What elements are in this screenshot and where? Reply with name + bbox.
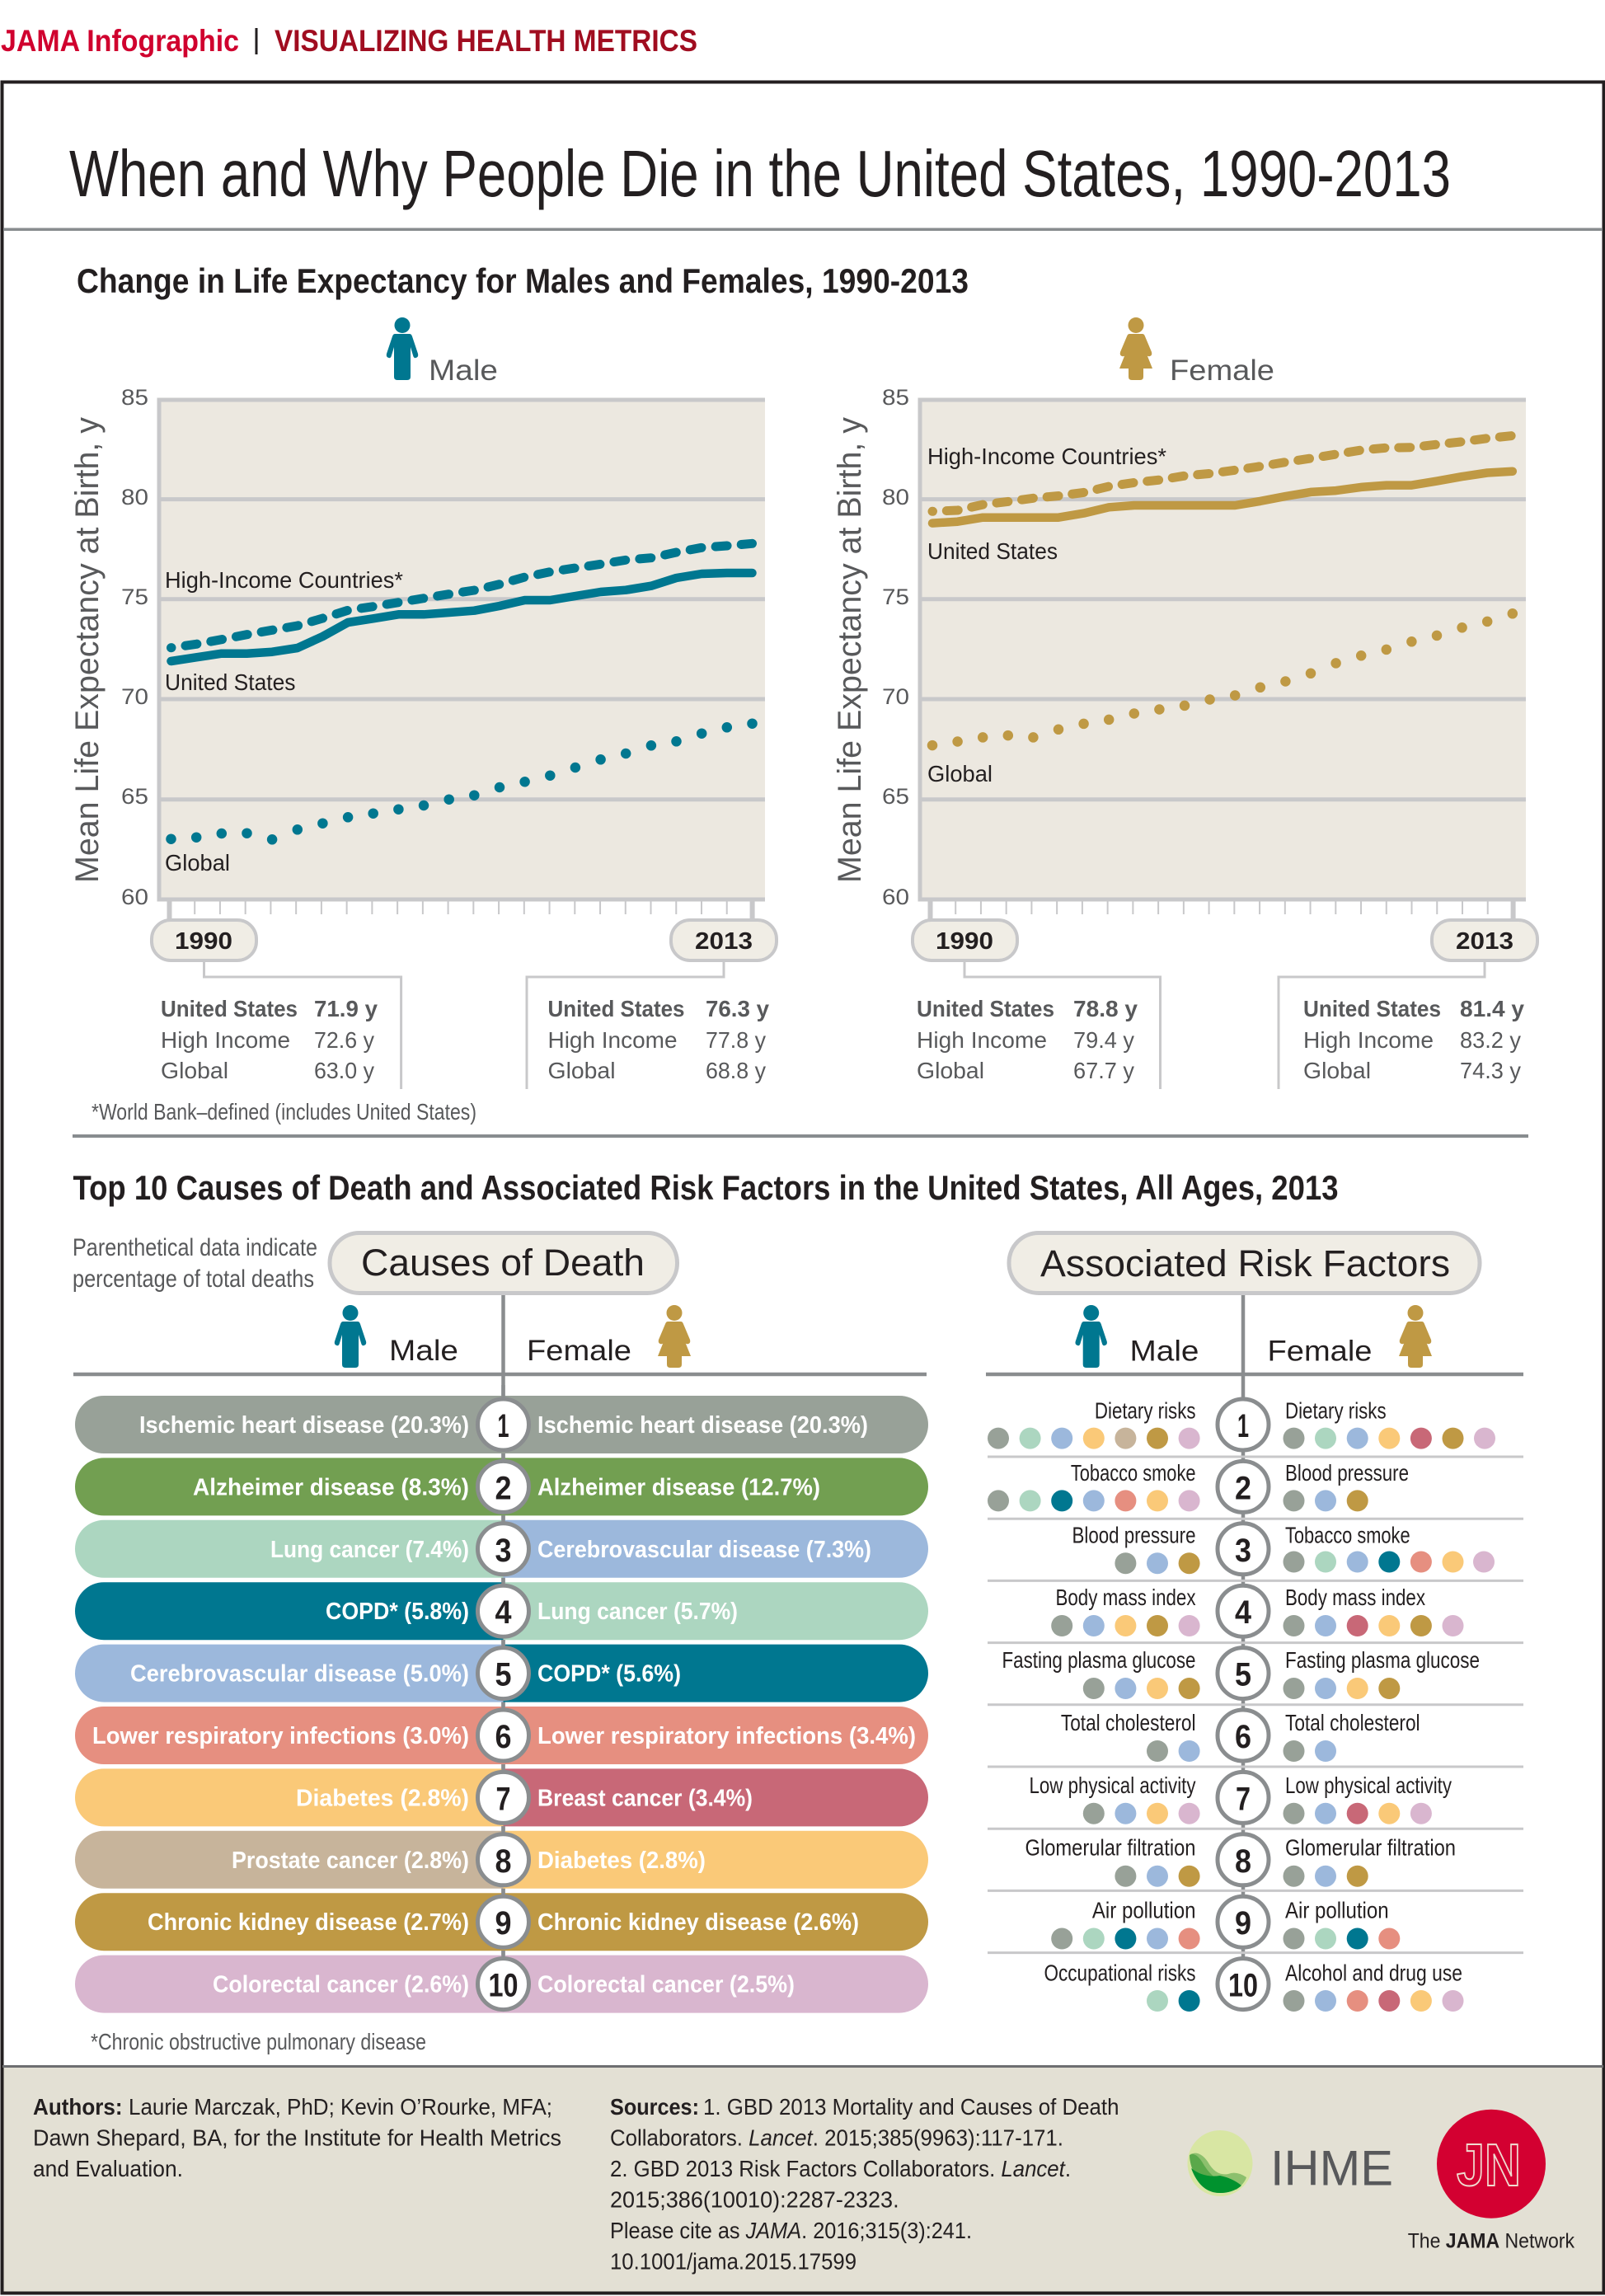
panel: footer [2,2065,1603,2274]
pill: Associated Risk Factors [1009,1233,1480,1293]
year pill 1990: 1990 [175,928,232,955]
y-axis values: 70 [121,684,148,709]
risk row 6: Total cholesterol [1061,1710,1195,1735]
data table female 1990 [917,996,1138,1083]
risk row 9: Air pollution [1285,1898,1389,1923]
authors [33,2094,561,2181]
cause row 9: 9 [495,1905,511,1942]
data table male 2013 [547,996,769,1083]
line: United States [171,573,752,661]
risk row 3 [1072,1523,1495,1575]
cause row 10: 10 [488,1968,518,2004]
icon and label: male [1075,1305,1199,1368]
data table male 1990 [161,996,378,1083]
risk row 3: 3 [1235,1533,1251,1569]
data table female 2013: 81.4 y [1460,996,1524,1021]
risk row 8 [1025,1834,1456,1887]
series labels: High-Income Countries* [165,567,403,593]
series labels: United States [927,538,1058,564]
sources: 1. GBD 2013 Mortality and Causes of Death [703,2094,1119,2120]
risk row 7: Low physical activity [1029,1772,1195,1798]
risk row 4 [1051,1585,1464,1636]
risk row 10: Occupational risks [1044,1960,1195,1985]
data table female 1990: 67.7 y [1073,1058,1134,1083]
risk row 4: Body mass index [1055,1585,1195,1610]
sources: Collaborators. Lancet. 2015;385(9963):117-171. [610,2125,1063,2150]
series labels: United States [165,669,295,695]
cause row 6 [75,1702,928,1764]
y-axis values: 60 [882,885,909,909]
data table female 2013: 83.2 y [1460,1027,1521,1053]
series labels: High-Income Countries* [927,444,1166,469]
header: JAMA Infographic: VISUALIZING HEALTH METRICS [275,24,697,58]
panel: female life expectancy chart [832,317,1537,1089]
data table male 1990: Global [161,1058,228,1083]
note: parenthetical data: percentage of total deaths [73,1265,314,1293]
y-axis values: 65 [882,784,909,809]
cause row 3 [75,1515,928,1578]
y-axis title: Mean Life Expectancy at Birth, y [832,417,868,883]
cause row 5 [75,1640,928,1702]
data table male 2013: United States [547,996,684,1021]
cause row 1 [75,1385,928,1453]
header: JAMA Infographic: JAMA Infographic [1,24,239,58]
risk row 6: 6 [1235,1719,1251,1755]
cause row 3: Cerebrovascular disease (7.3%) [537,1537,871,1563]
series labels: Global [165,850,230,876]
data table male 2013: 76.3 y [706,996,769,1021]
line chart: male [159,400,765,920]
risk row 1: Dietary risks [1285,1397,1387,1423]
risk row 2 [988,1460,1409,1512]
risk header rules [986,1295,1523,1987]
risk row 2: 2 [1235,1470,1251,1506]
icon and label: female: Female [527,1335,631,1367]
y-axis values [121,385,148,909]
footer panel background [2,2066,1603,2293]
cause row 10: Colorectal cancer (2.6%) [213,1972,469,1998]
risk row 7: 7 [1236,1781,1251,1817]
note: parenthetical data: Parenthetical data indicate [73,1234,317,1261]
risk row 7: Low physical activity [1285,1772,1452,1798]
line: high-income countries [171,543,752,648]
risk row 2: Tobacco smoke [1071,1460,1195,1486]
data table male 2013: 68.8 y [706,1058,766,1083]
risk row 6 [1061,1710,1420,1762]
line chart: female [920,400,1526,920]
risk row 5 [1002,1647,1480,1699]
risk row 1: 1 [1237,1408,1249,1444]
icon and label: male: Male [389,1335,458,1367]
data table male 1990: 63.0 y [314,1058,374,1083]
cause row 8 [75,1826,928,1889]
cause row 7: Diabetes (2.8%) [296,1785,469,1811]
data table male 1990: 72.6 y [314,1027,374,1053]
risk row 9 [1051,1896,1400,1949]
cause row 10: Colorectal cancer (2.5%) [537,1972,795,1998]
risk row 9: Air pollution [1092,1898,1195,1923]
risk row 1: Dietary risks [1095,1397,1195,1423]
cause row 1: Ischemic heart disease (20.3%) [139,1412,469,1439]
risk row 10 [1044,1959,1464,2012]
risk row 3: Tobacco smoke [1285,1523,1410,1548]
cause row 1: 1 [498,1408,509,1444]
cause row 1: Ischemic heart disease (20.3%) [537,1412,868,1439]
cause row 4: Lung cancer (5.7%) [537,1599,738,1625]
heading: life expectancy: Change in Life Expectancy for Males and Females, 1990-2013 [77,261,969,300]
year pill 1990 [913,920,1017,960]
icon: male figure [387,317,418,380]
cause row 9: Chronic kidney disease (2.6%) [537,1909,859,1936]
y-axis values: 70 [882,684,909,709]
data table female 1990: United States [917,996,1054,1021]
line: United States [932,472,1513,524]
cause row 3: 3 [495,1533,511,1569]
causes header rules [73,1295,927,2012]
icon and label: female: Female [1268,1336,1372,1367]
sources: Please cite as JAMA. 2016;315(3):241. [610,2218,972,2243]
icon: female figure [1119,317,1152,380]
data table female 1990: Global [917,1058,984,1083]
year pill 2013: 2013 [695,928,753,955]
data table male 2013: Global [547,1058,615,1083]
cause row 2: Alzheimer disease (12.7%) [537,1474,820,1500]
risk row 5: Fasting plasma glucose [1285,1647,1480,1673]
series labels [165,567,403,876]
cause row 5: COPD* (5.6%) [537,1661,681,1688]
cause row 8: 8 [495,1843,511,1880]
year pill 1990 [152,920,256,960]
footnote: COPD: *Chronic obstructive pulmonary disease [91,2029,426,2054]
cause row 3: Lung cancer (7.4%) [270,1537,469,1563]
risk row 10: Alcohol and drug use [1285,1960,1462,1985]
risk row 8: Glomerular filtration [1285,1835,1456,1860]
risk row 3: Blood pressure [1072,1523,1195,1548]
y-axis values: 60 [121,885,148,909]
icon and label: male [335,1305,458,1368]
risk row 5: Fasting plasma glucose [1002,1647,1195,1673]
risk row 10: 10 [1228,1968,1258,2004]
pill: Causes of Death: Causes of Death [361,1242,645,1284]
data table female 2013: United States [1303,996,1441,1021]
data table male 1990: High Income [161,1027,290,1053]
year pill 2013 [1432,920,1537,960]
cause row 10 [75,1951,928,2013]
sources: 2. GBD 2013 Risk Factors Collaborators. Lancet. [610,2156,1071,2181]
data table female 2013: Global [1303,1058,1371,1083]
chart label: Female: Female [1170,354,1274,387]
cause row 9: Chronic kidney disease (2.7%) [148,1909,469,1936]
cause row 2: 2 [495,1470,511,1506]
data table female 2013: High Income [1303,1027,1434,1053]
panel: associated risk factors [986,1233,1523,2012]
logo: JAMA Network: JN [1457,2133,1521,2199]
risk row 2: Blood pressure [1285,1460,1409,1486]
cause row 6: Lower respiratory infections (3.0%) [92,1723,469,1749]
data table male 1990: United States [161,996,298,1021]
series labels: Global [927,761,993,786]
risk row 8: Glomerular filtration [1025,1835,1195,1860]
logo: JAMA Network: The JAMA Network [1408,2230,1574,2253]
year pill 1990: 1990 [936,928,993,955]
cause row 6: 6 [495,1719,511,1755]
sources: Sources: [610,2094,699,2120]
cause row 2 [75,1453,928,1515]
line: global [932,613,1513,745]
cause row 6: Lower respiratory infections (3.4%) [537,1723,916,1749]
note: parenthetical data [73,1234,317,1293]
leader lines [204,961,724,1089]
data table male 2013: High Income [547,1027,678,1053]
panel: male life expectancy chart [69,317,777,1089]
risk row 4: 4 [1235,1594,1252,1631]
header: JAMA Infographic [1,24,697,58]
pill: Associated Risk Factors: Associated Risk Factors [1040,1242,1450,1284]
data table female 2013: 74.3 y [1460,1058,1521,1083]
sources: 10.1001/jama.2015.17599 [610,2249,856,2274]
cause row 5: 5 [495,1657,511,1693]
data table female 2013 [1303,996,1524,1083]
leader lines [964,961,1485,1089]
risk row 7 [1029,1772,1452,1824]
authors: Laurie Marczak, PhD; Kevin O’Rourke, MFA; [129,2094,552,2120]
series labels [927,444,1166,786]
y-axis title: Mean Life Expectancy at Birth, y [69,417,106,883]
y-axis values: 85 [882,385,909,410]
authors: Dawn Shepard, BA, for the Institute for Health Metrics [33,2125,561,2150]
icon and label: male: Male [1129,1336,1199,1367]
data table female 1990: 78.8 y [1073,996,1138,1021]
cause row 4: 4 [495,1594,512,1631]
logo: IHME [1187,2130,1393,2196]
risk row 5: 5 [1235,1657,1251,1693]
line: global [171,724,752,839]
cause row 7: 7 [496,1781,511,1817]
y-axis values: 75 [121,585,148,609]
footnote: World Bank: *World Bank–defined (includes United States) [92,1099,476,1125]
data table female 1990: High Income [917,1027,1047,1053]
y-axis values: 80 [121,485,148,509]
y-axis values [882,385,909,909]
icon and label: female [527,1305,691,1368]
data table female 1990: 79.4 y [1073,1027,1134,1053]
cause row 8: Diabetes (2.8%) [537,1848,706,1874]
panel: causes of death [73,1233,928,2013]
year pill 2013 [671,920,777,960]
data table male 1990: 71.9 y [314,996,378,1021]
risk row 6: Total cholesterol [1285,1710,1420,1735]
authors: Authors: [33,2094,123,2120]
pill: Causes of Death [330,1233,678,1293]
logo: JAMA Network [1408,2110,1574,2253]
cause row 4 [75,1578,928,1640]
year pill 2013: 2013 [1456,928,1513,955]
cause row 2: Alzheimer disease (8.3%) [193,1474,469,1500]
cause row 8: Prostate cancer (2.8%) [232,1848,469,1874]
risk row 4: Body mass index [1285,1585,1425,1610]
logo: IHME: IHME [1270,2141,1393,2196]
icon and label: female [1268,1305,1432,1368]
y-axis values: 75 [882,585,909,609]
y-axis values: 65 [121,784,148,809]
heading: top 10 causes: Top 10 Causes of Death and Associated Risk Factors in the United States, All Ages, 2013 [73,1168,1339,1207]
authors: and Evaluation. [33,2156,183,2181]
cause row 7: Breast cancer (3.4%) [537,1785,753,1811]
y-axis values: 80 [882,485,909,509]
line: high-income countries [932,435,1513,511]
data table male 2013: 77.8 y [706,1027,766,1053]
sources [610,2094,1119,2274]
chart label: Male: Male [429,354,498,387]
cause row 4: COPD* (5.8%) [326,1599,469,1625]
cause row 5: Cerebrovascular disease (5.0%) [130,1661,469,1688]
risk row 1 [988,1397,1495,1450]
y-axis values: 85 [121,385,148,410]
cause row 9 [75,1889,928,1951]
sources: 2015;386(10010):2287-2323. [610,2186,899,2213]
cause row 7 [75,1764,928,1826]
risk row 8: 8 [1235,1843,1251,1880]
risk row 9: 9 [1235,1905,1251,1942]
